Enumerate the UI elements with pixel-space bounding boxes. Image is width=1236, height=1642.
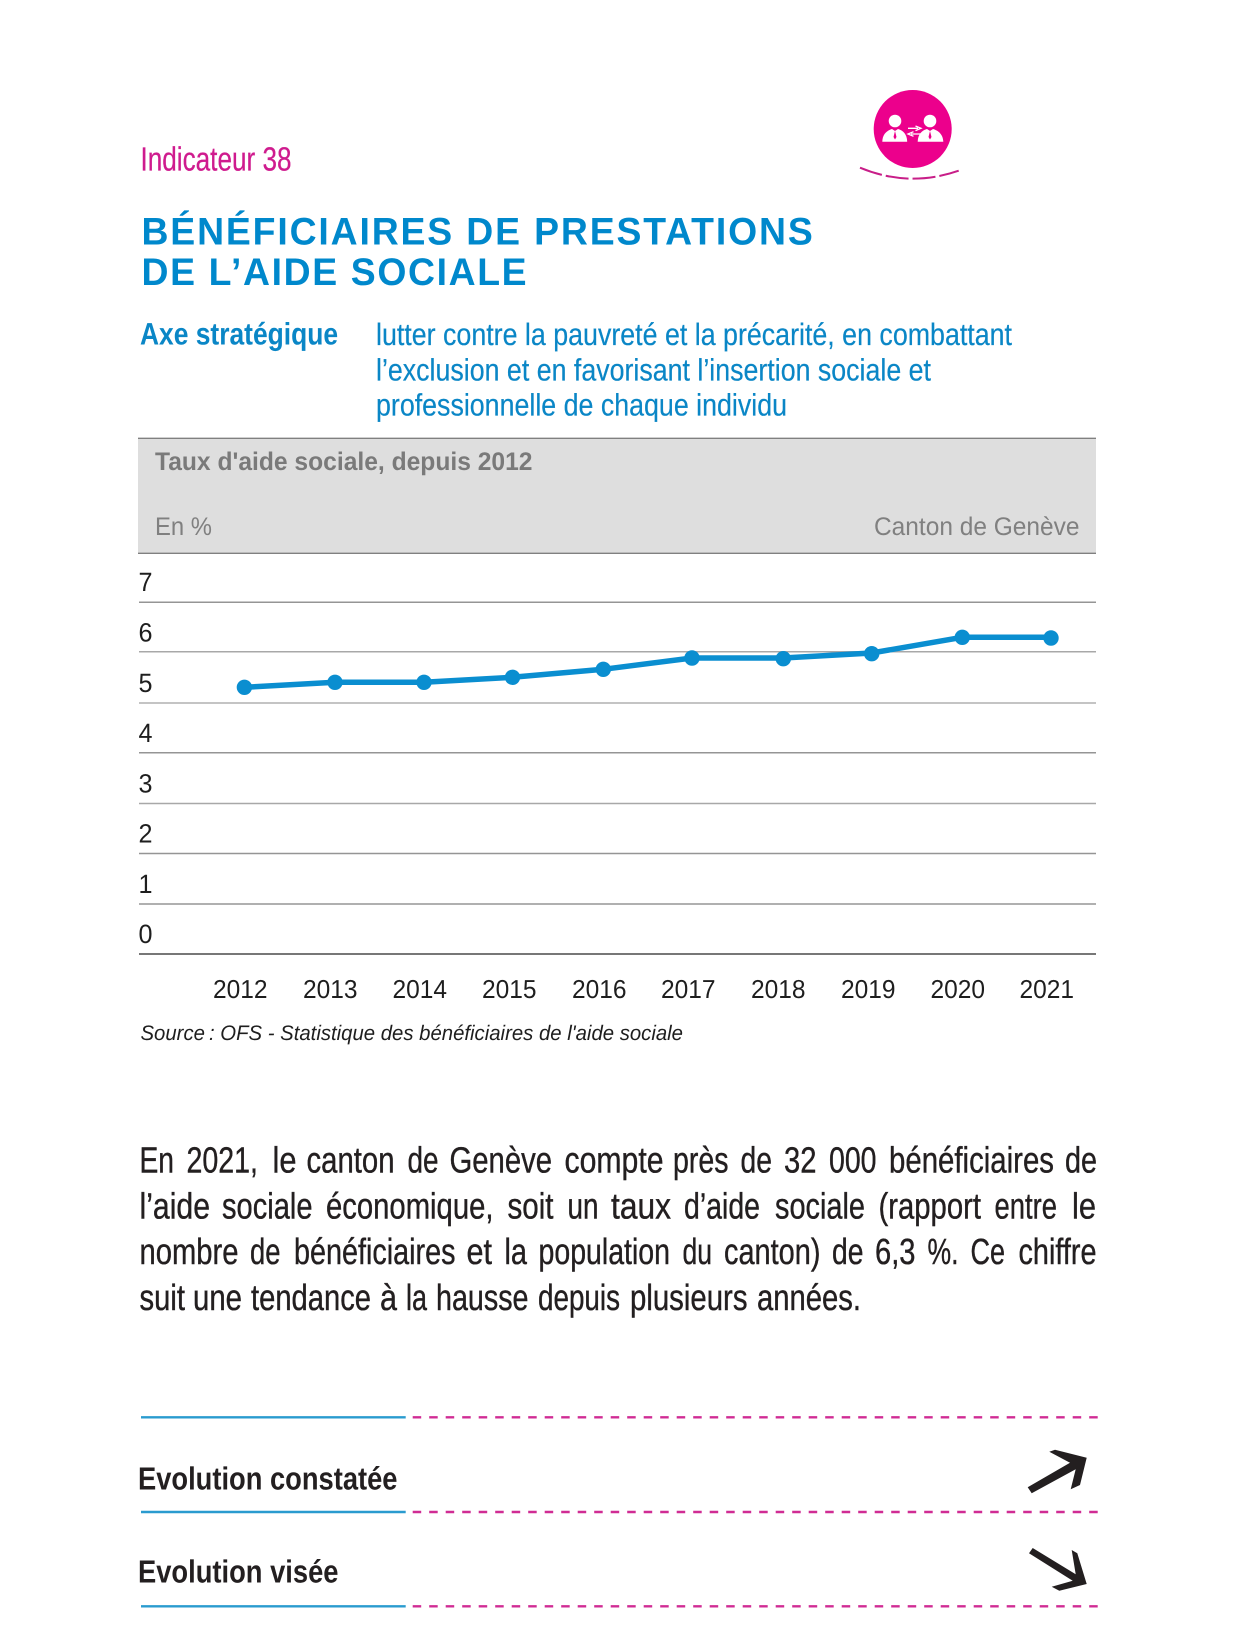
text block: paragraph: de: [1065, 1140, 1097, 1181]
text block: paragraph: Ce: [970, 1231, 1005, 1272]
text block: paragraph: population: [538, 1231, 670, 1272]
divider rows: [141, 1417, 1099, 1606]
unit: En %: [155, 513, 212, 541]
x axis labels: 2015: [482, 974, 536, 1004]
x axis labels: [213, 974, 1074, 1004]
text block: paragraph: à: [380, 1277, 398, 1318]
text block: paragraph: près: [673, 1140, 728, 1181]
label: evolution visée: Evolution visée: [138, 1554, 338, 1590]
text block: paragraph: sociale: [775, 1185, 865, 1226]
text block: paragraph: d’aide: [684, 1185, 760, 1226]
text block: paragraph: 6,3: [875, 1231, 916, 1272]
y axis labels: 4: [138, 718, 152, 748]
x axis labels: 2017: [661, 974, 716, 1004]
chart heading: Taux d'aide sociale, depuis 2012: [155, 448, 532, 476]
text block: paragraph: En: [140, 1140, 174, 1181]
text block: paragraph: taux: [611, 1185, 671, 1226]
text block: paragraph: canton): [724, 1231, 820, 1272]
region: Canton de Genève: [874, 513, 1080, 541]
text block: paragraph: depuis: [538, 1277, 620, 1318]
text block: paragraph: suit: [140, 1277, 185, 1318]
y axis labels: 3: [138, 768, 152, 798]
text block: paragraph: la: [406, 1277, 428, 1318]
y axis labels: 0: [138, 919, 152, 949]
text block: paragraph: sociale: [222, 1185, 312, 1226]
text block: paragraph: (rapport: [878, 1185, 981, 1226]
text block: paragraph: Genève: [450, 1140, 552, 1181]
text block: paragraph: bénéficiaires: [889, 1140, 1054, 1181]
x axis labels: 2019: [841, 974, 896, 1004]
text block: paragraph: soit: [508, 1185, 554, 1226]
panel: chart header: [138, 438, 1096, 553]
label: evolution constatée: Evolution constatée: [138, 1460, 398, 1496]
label: axe stratégique: Axe stratégique: [140, 316, 338, 352]
title: BÉNÉFICIAIRES DE PRESTATIONS: [142, 209, 813, 253]
y axis labels: 1: [138, 869, 152, 899]
text block: paragraph: 000: [829, 1140, 876, 1181]
text block: paragraph: [140, 1140, 1097, 1318]
x axis labels: 2013: [303, 974, 358, 1004]
text block: paragraph: la: [504, 1231, 528, 1272]
text block: paragraph: tendance: [251, 1277, 371, 1318]
y axis labels: 7: [138, 567, 152, 597]
text block: paragraph: %.: [928, 1231, 958, 1272]
text block: paragraph: l’aide: [140, 1185, 210, 1226]
x axis labels: 2021: [1020, 974, 1074, 1004]
title: DE L’AIDE SOCIALE: [142, 251, 527, 294]
data line: [237, 630, 1059, 695]
label: indicateur 38: Indicateur 38: [140, 142, 292, 179]
x axis labels: 2020: [930, 974, 985, 1004]
text block: paragraph: canton: [306, 1140, 394, 1181]
title: [142, 209, 813, 294]
x axis labels: 2014: [392, 974, 447, 1004]
y axis labels: [138, 567, 152, 949]
text block: axe description: lutter contre la pauvreté et la précarité, en combattant: [376, 317, 1012, 352]
text block: paragraph: économique,: [326, 1185, 494, 1226]
arrow: up right: [1028, 1450, 1087, 1493]
x axis labels: 2012: [213, 974, 268, 1004]
arrow: down right: [1029, 1548, 1087, 1591]
text block: paragraph: années.: [757, 1277, 861, 1318]
text block: paragraph: et: [466, 1231, 492, 1272]
text block: paragraph: le: [1072, 1185, 1096, 1226]
x axis labels: 2018: [751, 974, 806, 1004]
text block: paragraph: 32: [784, 1140, 816, 1181]
text block: paragraph: le: [272, 1140, 296, 1181]
text block: paragraph: chiffre: [1018, 1231, 1096, 1272]
text block: paragraph: de: [250, 1231, 280, 1272]
text block: paragraph: 2021,: [186, 1140, 258, 1181]
text block: paragraph: du: [682, 1231, 712, 1272]
line chart: [138, 567, 1096, 1004]
icon: two people exchanging: [860, 90, 959, 179]
y axis labels: 6: [138, 618, 152, 648]
text block: paragraph: entre: [994, 1185, 1057, 1226]
text block: paragraph: nombre: [140, 1231, 238, 1272]
y axis labels: 2: [138, 819, 152, 849]
text block: paragraph: de: [740, 1140, 772, 1181]
text block: paragraph: une: [193, 1277, 242, 1318]
text block: axe description: [376, 317, 1012, 422]
text block: paragraph: bénéficiaires: [294, 1231, 456, 1272]
y axis labels: 5: [138, 668, 152, 698]
text block: paragraph: de: [832, 1231, 864, 1272]
x axis labels: 2016: [572, 974, 626, 1004]
text block: paragraph: hausse: [436, 1277, 528, 1318]
text block: axe description: l’exclusion et en favorisant l’insertion sociale et: [376, 352, 931, 388]
text block: paragraph: un: [568, 1185, 598, 1226]
text block: axe description: professionnelle de chaque individu: [376, 388, 787, 422]
text block: paragraph: de: [408, 1140, 438, 1181]
text block: paragraph: compte: [564, 1140, 664, 1181]
source note: Source : OFS - Statistique des bénéficiaires de l'aide sociale: [140, 1022, 683, 1045]
text block: paragraph: plusieurs: [630, 1277, 748, 1318]
